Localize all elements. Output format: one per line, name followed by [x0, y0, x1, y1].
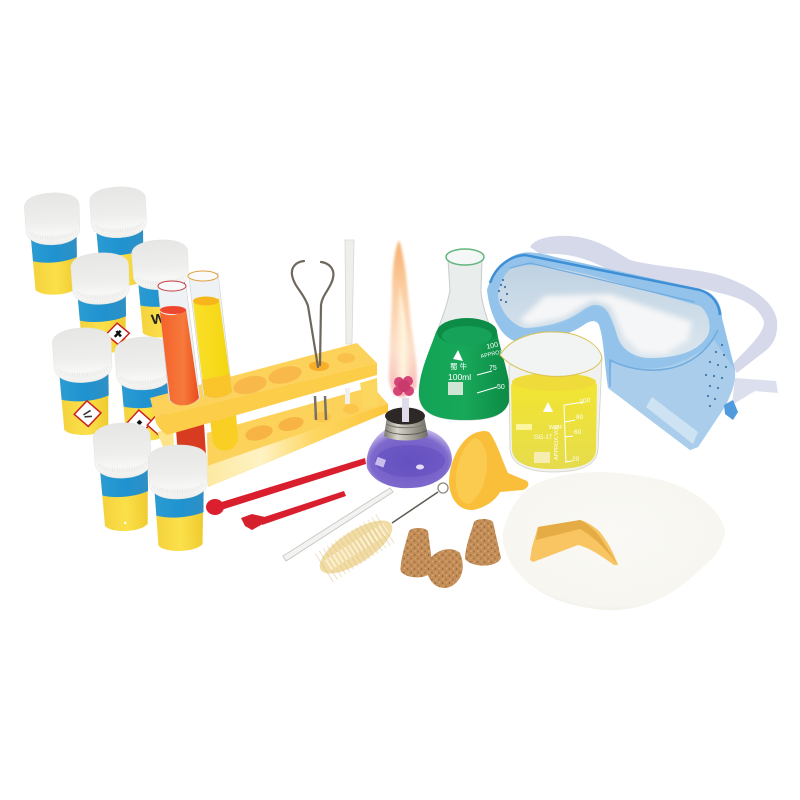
green liquid	[419, 321, 510, 420]
flask rim	[446, 249, 484, 265]
base holes	[244, 404, 359, 443]
jar 4: WAR	[150, 309, 188, 328]
jar 6	[114, 336, 175, 442]
beaker glass	[509, 358, 602, 472]
jar 7	[92, 422, 155, 532]
jar 5	[52, 326, 116, 436]
flask markings: 50	[497, 384, 505, 391]
cork right	[465, 519, 501, 566]
test tube: yellow lower part	[210, 414, 238, 451]
lens	[498, 265, 710, 358]
top holes	[231, 353, 355, 397]
funnel opening	[456, 438, 487, 504]
flask markings: APPROX	[480, 349, 504, 360]
jar 2: G	[133, 262, 144, 276]
beaker markings: APPROX.VOL	[554, 425, 560, 460]
tong lower wires	[315, 396, 326, 420]
cork left	[401, 528, 433, 577]
corks	[401, 519, 501, 588]
test tube rack	[150, 343, 388, 487]
jars: back rows	[24, 186, 192, 442]
rack legs	[360, 378, 378, 409]
funnel	[449, 431, 528, 510]
flask markings: 100	[486, 342, 499, 351]
funnel cone and stem	[449, 431, 528, 510]
rack base front face	[207, 404, 388, 487]
rack top plate	[150, 343, 377, 417]
jar 3	[70, 251, 133, 355]
strap buckle	[724, 400, 738, 420]
jar 8	[148, 444, 210, 552]
beaker markings: 60	[574, 429, 582, 436]
brush body	[312, 511, 400, 583]
rack top front face	[155, 363, 377, 435]
flame	[389, 240, 417, 397]
red spoon long	[206, 458, 366, 515]
brush wire	[392, 492, 438, 523]
lower shield	[608, 340, 735, 450]
yellow liquid	[511, 374, 597, 469]
beaker markings	[516, 397, 591, 463]
flask markings: 75	[489, 365, 497, 372]
glass rod lower part	[345, 388, 350, 404]
test tube: orange lower part	[176, 424, 206, 455]
flask markings	[448, 342, 505, 395]
beaker markings: 100	[579, 397, 591, 406]
goggle frame	[487, 252, 735, 450]
red spoon flat	[241, 491, 346, 530]
vent holes	[498, 279, 727, 407]
shield edge	[646, 397, 698, 444]
purple glass body	[367, 430, 452, 488]
beaker markings: WEIF	[549, 425, 563, 431]
jars: front row	[92, 422, 210, 552]
flask glass	[419, 260, 510, 420]
beaker markings: 20	[572, 456, 580, 463]
beaker markings: 80	[576, 414, 584, 421]
pH paper strips	[530, 520, 618, 565]
frame outline	[490, 255, 720, 315]
test tube: orange	[158, 281, 200, 405]
beaker	[500, 332, 602, 472]
glass tube	[283, 488, 393, 561]
wick	[402, 398, 409, 422]
lens highlight	[520, 294, 692, 354]
pink flame head	[393, 376, 414, 396]
test tube: yellow	[188, 271, 232, 398]
rack base	[207, 386, 388, 487]
beaker rim	[500, 332, 602, 376]
test tube brush	[312, 483, 448, 583]
jar 4	[131, 239, 192, 339]
metal collar	[384, 416, 428, 440]
flask markings: 蜀 牛	[450, 361, 468, 371]
filter paper plate	[503, 472, 725, 610]
jar 1	[24, 192, 84, 296]
black top	[385, 408, 425, 424]
strap end	[732, 378, 778, 405]
spirit burner	[367, 376, 452, 488]
flask markings: 100ml	[448, 372, 471, 382]
erlenmeyer flask	[419, 249, 510, 420]
safety goggles	[487, 236, 778, 450]
glass rod	[345, 240, 354, 344]
jar 2	[89, 186, 150, 288]
brush bristles	[324, 527, 388, 568]
beaker markings: GG-17	[534, 435, 553, 441]
metal tongs	[292, 261, 333, 367]
elastic strap	[530, 236, 777, 373]
cork middle	[427, 549, 463, 588]
